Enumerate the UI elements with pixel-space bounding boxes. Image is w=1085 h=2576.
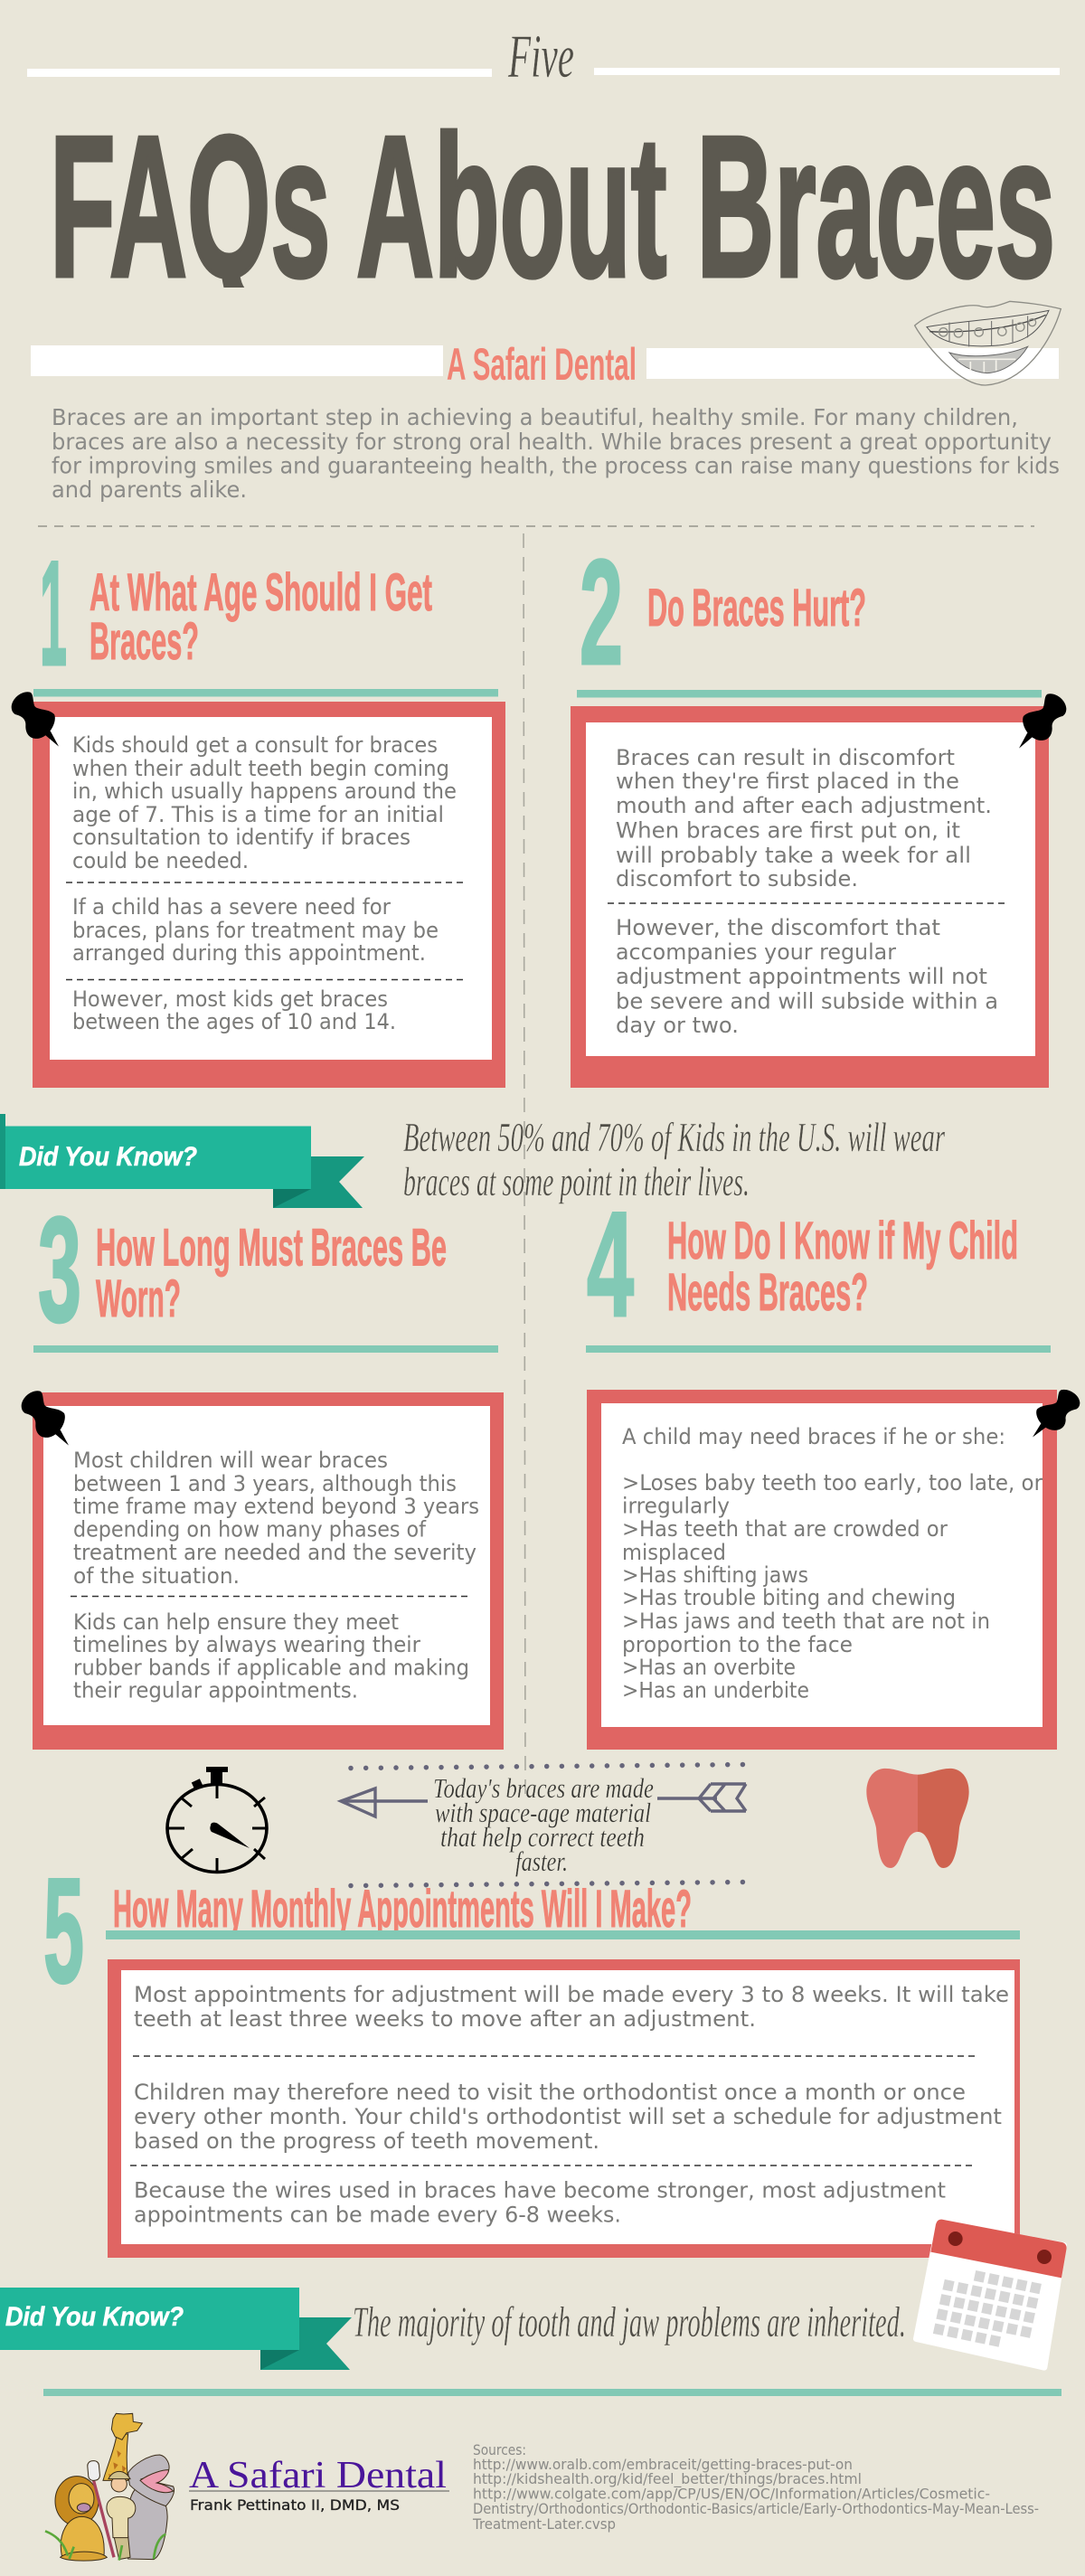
panel: answer 1 <box>33 702 505 1088</box>
panel: answer 1: However, most kids get braces <box>72 986 388 1012</box>
panel: answer 3: of the situation. <box>73 1563 240 1589</box>
arrow: fletched tail <box>657 1784 746 1811</box>
panel: answer 3 <box>33 1392 504 1750</box>
panel: answer 1: age of 7. This is a time for an initial <box>72 802 444 827</box>
icon: push pin 3 <box>22 1391 69 1446</box>
panel: answer 3: treatment are needed and the severity <box>73 1540 476 1565</box>
question 5 heading: 5 <box>43 1847 84 2014</box>
logo wordmark: A Safari Dental <box>189 2455 447 2496</box>
icon: push pin 2 <box>1019 694 1066 749</box>
panel: answer 5 <box>108 1959 1020 2258</box>
sources: Treatment-Later.cvsp <box>472 2515 616 2533</box>
question 3 heading: Worn? <box>96 1269 181 1328</box>
panel: answer 1: braces, plans for treatment may be <box>72 918 439 943</box>
panel: answer 2: discomfort to subside. <box>616 866 858 892</box>
question 4 heading: Needs Braces? <box>667 1263 868 1322</box>
panel: answer 4: proportion to the face <box>622 1632 853 1657</box>
panel: answer 4: >Loses baby teeth too early, too late, or <box>622 1470 1043 1496</box>
panel: answer 5: based on the progress of teeth movement. <box>134 2128 599 2154</box>
icon: tooth <box>866 1769 969 1868</box>
callout: today's braces: faster. <box>515 1845 568 1877</box>
panel: answer 3: timelines by always wearing their <box>73 1632 420 1657</box>
subtitle band: A Safari Dental <box>31 339 1059 390</box>
fact 1 <box>403 1114 946 1204</box>
panel: answer 4: misplaced <box>622 1540 726 1565</box>
callout: today's braces: Today's braces are made <box>433 1772 654 1804</box>
panel: answer 4: >Has an overbite <box>622 1655 796 1680</box>
sources <box>472 2441 1039 2533</box>
logo wordmark <box>189 2455 449 2514</box>
panel: answer 4 <box>587 1390 1057 1750</box>
panel: answer 5: teeth at least three weeks to move after an adjustment. <box>134 2006 756 2032</box>
question 3 heading: How Long Must Braces Be <box>96 1219 447 1277</box>
panel: answer 1: consultation to identify if braces <box>72 825 410 850</box>
panel: answer 3: rubber bands if applicable and making <box>73 1655 469 1680</box>
question 1 heading <box>33 530 498 696</box>
header: Five with white rules: Five <box>507 22 574 90</box>
panel: answer 2: However, the discomfort that <box>616 915 940 940</box>
footer rule <box>43 2389 1061 2396</box>
panel: answer 2: be severe and will subside within a <box>616 989 998 1014</box>
ribbon: did you know 2 <box>0 2288 352 2370</box>
question 1 heading: At What Age Should I Get <box>90 563 432 622</box>
panel: answer 4: >Has teeth that are crowded or <box>622 1516 948 1542</box>
question 2 heading: 2 <box>580 529 623 695</box>
panel: answer 5: Because the wires used in braces have become stronger, most adjustment <box>134 2177 946 2203</box>
panel: answer 3: Kids can help ensure they meet <box>73 1609 399 1635</box>
header: Five with white rules <box>27 22 1060 90</box>
icon: calendar <box>916 2220 1067 2367</box>
question 4 heading: 4 <box>587 1181 634 1347</box>
ribbon: did you know 1: Did You Know? <box>19 1142 197 1172</box>
logo wordmark: Frank Pettinato II, DMD, MS <box>190 2496 400 2514</box>
icon: stopwatch <box>167 1767 268 1872</box>
panel: answer 2: adjustment appointments will not <box>616 964 987 989</box>
panel: answer 1: in, which usually happens around the <box>72 778 457 804</box>
question 5 heading <box>43 1847 1020 2014</box>
logo illustration: safari animals <box>45 2413 175 2561</box>
question 2 heading: Do Braces Hurt? <box>647 579 866 637</box>
ribbon: did you know 1 <box>0 1114 364 1208</box>
panel: answer 1: If a child has a severe need for <box>72 894 391 920</box>
panel: answer 1: when their adult teeth begin coming <box>72 756 449 781</box>
question 1 heading: Braces? <box>90 612 199 671</box>
panel: answer 2: When braces are first put on, it <box>616 817 960 843</box>
sources: Dentistry/Orthodontics/Orthodontic-Basics/article/Early-Orthodontics-May-Mean-Less- <box>473 2500 1039 2517</box>
sources: http://www.oralb.com/embraceit/getting-braces-put-on <box>473 2456 853 2473</box>
callout: today's braces: with space-age material <box>435 1797 651 1828</box>
intro paragraph: braces are also a necessity for strong oral health. While braces present a great opportunity <box>52 429 1052 455</box>
arrow: pointing left <box>341 1788 428 1816</box>
icon: push pin 1 <box>12 692 59 747</box>
panel: answer 3: Most children will wear braces <box>73 1448 388 1473</box>
panel: answer 2: will probably take a week for all <box>616 843 971 868</box>
icon: smile with braces <box>915 301 1061 385</box>
panel: answer 3: their regular appointments. <box>73 1678 358 1703</box>
question 3 heading <box>33 1186 498 1353</box>
panel: answer 2: when they're first placed in the <box>616 769 959 794</box>
panel: answer 3: between 1 and 3 years, although this <box>73 1471 457 1496</box>
panel: answer 2 <box>571 706 1049 1088</box>
sources: Sources: <box>473 2441 526 2458</box>
panel: answer 4: >Has shifting jaws <box>622 1562 808 1588</box>
panel: answer 5: appointments can be made every 6-8 weeks. <box>134 2203 621 2228</box>
intro paragraph: for improving smiles and guaranteeing health, the process can raise many questions for kids <box>52 452 1060 479</box>
panel: answer 2: mouth and after each adjustment. <box>616 793 992 818</box>
intro paragraph: and parents alike. <box>52 477 247 503</box>
question 1 heading: 1 <box>40 530 67 696</box>
panel: answer 4: A child may need braces if he or she: <box>622 1424 1005 1449</box>
ribbon: did you know 2: Did You Know? <box>5 2302 184 2332</box>
panel: answer 5: Most appointments for adjustment will be made every 3 to 8 weeks. It will take <box>134 1982 1009 2007</box>
panel: answer 2: Braces can result in discomfort <box>616 745 955 770</box>
question 4 heading <box>586 1181 1051 1353</box>
intro paragraph <box>52 404 1060 503</box>
panel: answer 2: accompanies your regular <box>616 939 896 965</box>
intro paragraph: Braces are an important step in achieving a beautiful, healthy smile. For many children, <box>52 404 1018 430</box>
sources: http://kidshealth.org/kid/feel_better/things/braces.html <box>473 2470 862 2488</box>
panel: answer 3: time frame may extend beyond 3 years <box>73 1494 479 1519</box>
icon: push pin 4 <box>1033 1390 1080 1437</box>
question 2 heading <box>577 529 1042 698</box>
dotted rules <box>351 1765 743 1886</box>
panel: answer 5: Children may therefore need to visit the orthodontist once a month or once <box>134 2080 966 2105</box>
callout: today's braces <box>433 1772 654 1877</box>
panel: answer 4: >Has jaws and teeth that are not in <box>622 1609 990 1634</box>
question 3 heading: 3 <box>38 1186 81 1353</box>
panel: answer 1: between the ages of 10 and 14. <box>72 1009 396 1034</box>
fact 1: braces at some point in their lives. <box>403 1158 750 1204</box>
panel: answer 2: day or two. <box>616 1013 739 1038</box>
panel: answer 4: irregularly <box>622 1494 730 1519</box>
panel: answer 5: every other month. Your child's orthodontist will set a schedule for adjustment <box>134 2104 1002 2129</box>
panel: answer 4: >Has trouble biting and chewing <box>622 1585 956 1610</box>
panel: answer 1: arranged during this appointment. <box>72 940 426 966</box>
sources: http://www.colgate.com/app/CP/US/EN/OC/Information/Articles/Cosmetic- <box>473 2485 990 2503</box>
panel: answer 1: could be needed. <box>72 848 249 873</box>
callout: today's braces: that help correct teeth <box>440 1821 645 1853</box>
panel: answer 3: depending on how many phases of <box>73 1517 427 1543</box>
subtitle band: A Safari Dental: A Safari Dental <box>447 339 637 390</box>
panel: answer 4: >Has an underbite <box>622 1678 809 1703</box>
panel: answer 1: Kids should get a consult for braces <box>72 732 438 758</box>
